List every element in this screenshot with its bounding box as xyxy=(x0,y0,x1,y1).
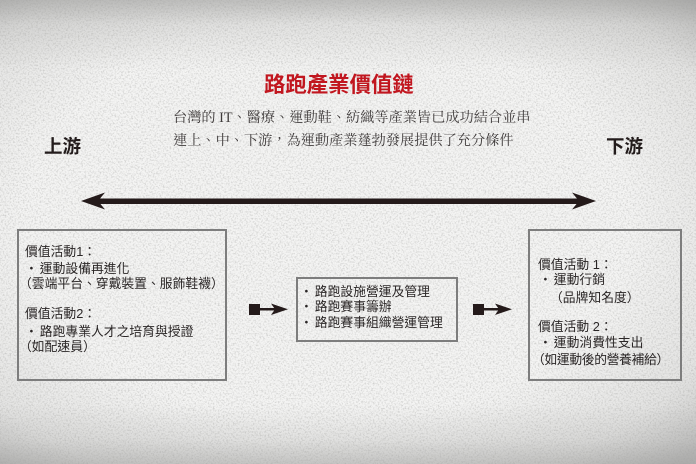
intro text: 台灣的 IT、醫療、運動鞋、紡織等產業皆已成功結合並串 xyxy=(173,110,530,126)
intro text: 連上、中、下游，為運動產業蓬勃發展提供了充分條件 xyxy=(173,133,514,149)
upstream value activities: 價值活動2： xyxy=(25,306,96,321)
downstream value activities: （品牌知名度） xyxy=(550,290,640,305)
upstream value activities: ・路跑專業人才之培育與授證 xyxy=(25,324,193,339)
downstream value activities xyxy=(532,257,669,367)
panel: downstream xyxy=(528,229,682,381)
downstream heading: 下游 xyxy=(606,136,643,157)
intro text xyxy=(173,110,530,149)
title: 路跑產業價值鏈 xyxy=(264,73,414,97)
downstream value activities: ・運動消費性支出 xyxy=(539,335,643,350)
downstream value activities: 價值活動 2： xyxy=(538,319,613,334)
upstream value activities: 價值活動1： xyxy=(25,244,96,259)
upstream value activities: （如配速員） xyxy=(19,339,96,354)
upstream heading: 上游 xyxy=(44,136,81,157)
panel: midstream xyxy=(296,277,458,342)
downstream value activities: ・運動行銷 xyxy=(539,272,605,287)
panel: upstream xyxy=(17,229,227,381)
upstream value activities xyxy=(19,244,224,354)
upstream value activities: ・運動設備再進化 xyxy=(25,261,129,276)
downstream value activities: 價值活動 1： xyxy=(538,257,613,272)
downstream value activities: （如運動後的營養補給） xyxy=(532,352,669,367)
midstream activities: ・路跑賽事組織營運管理 xyxy=(300,315,443,330)
upstream value activities: （雲端平台、穿戴裝置、服飾鞋襪） xyxy=(19,276,224,291)
midstream activities: ・路跑設施營運及管理 xyxy=(300,284,430,299)
midstream activities xyxy=(300,284,443,330)
midstream activities: ・路跑賽事籌辦 xyxy=(300,299,392,314)
